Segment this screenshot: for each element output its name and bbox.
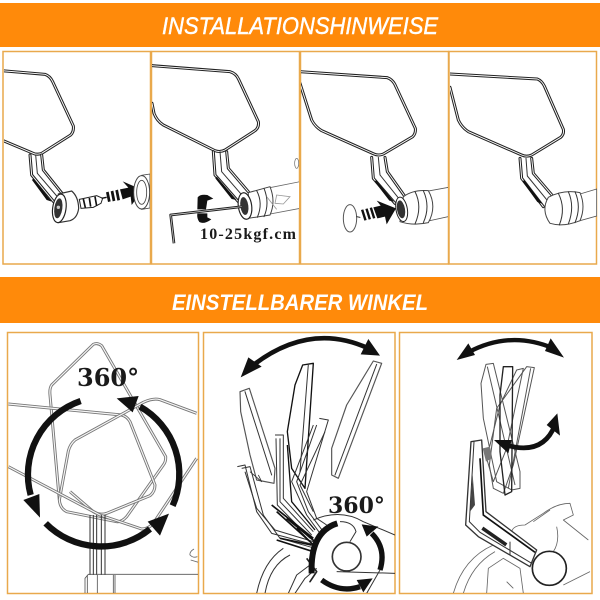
panel: step 3 fit cap: [300, 52, 448, 264]
mirror outline step 2: [152, 66, 259, 152]
mirror arm side view: [466, 440, 537, 567]
mirrors side view: [240, 361, 382, 488]
knob step 2: [238, 192, 252, 220]
overlaid mirror outlines: [8, 344, 197, 529]
mirror arm step 4: [520, 158, 553, 207]
handlebar grip with lever: [248, 158, 300, 218]
mirror arm step 2: [213, 152, 248, 202]
banner: Einstellbarer Winkel: [0, 277, 600, 323]
banner: Einstellbarer Winkel: EINSTELLBARER WINKEL: [172, 290, 428, 315]
panel: step 1 insert bolt: [2, 52, 150, 264]
panel: 360 degree rotation: [8, 332, 198, 594]
arrow: insert: [106, 181, 134, 205]
arrow: rotate bottom: [46, 514, 169, 546]
mirror outline step 3: [300, 72, 415, 155]
panel: step 2 tighten with hex key: [152, 52, 300, 264]
end cap: [343, 205, 360, 232]
mirror outline step 1: [2, 71, 73, 154]
handlebar grip step 4: [545, 189, 597, 225]
label: 360 degrees: 360°: [77, 363, 139, 392]
handlebar grip: [134, 174, 150, 209]
bolt: [79, 196, 107, 208]
mirror stem and base: [85, 515, 198, 593]
mirror outline step 4: [450, 74, 564, 156]
bar-end knob: [51, 191, 79, 223]
arrow: rotation: [197, 195, 213, 223]
panel: swivel adjustment: [400, 332, 592, 594]
arrow: swivel curved: [494, 413, 560, 453]
arrow: rotate right: [117, 396, 179, 506]
handlebar end circle: [532, 551, 566, 585]
handlebar lines: [453, 503, 590, 593]
banner: Installationshinweise: INSTALLATIONSHINWEISE: [162, 13, 439, 40]
panel: tilt adjustment: [204, 332, 395, 594]
arrow: fit cap: [361, 201, 396, 224]
mirror arm step 3: [372, 157, 405, 203]
mirror arm step 1: [30, 155, 63, 203]
panel: step 4 finished: [449, 52, 597, 264]
torque label: 10-25kgf.cm: [200, 226, 297, 243]
mirror arms: [237, 418, 328, 582]
arrow: swivel top double-headed: [457, 338, 564, 360]
arrow: rotate left: [23, 401, 81, 518]
arrow: tilt double-headed: [241, 338, 380, 377]
crossed mirrors side view: [481, 363, 534, 495]
label: 360 degrees second: 360°: [328, 493, 385, 519]
hex key: [171, 207, 242, 243]
arrows: 360 around bar: [312, 523, 382, 592]
handlebar and lever lines: [257, 515, 395, 593]
banner: Installationshinweise: [0, 3, 600, 47]
handlebar end circle: [332, 542, 361, 571]
handlebar grip step 3: [394, 187, 448, 224]
